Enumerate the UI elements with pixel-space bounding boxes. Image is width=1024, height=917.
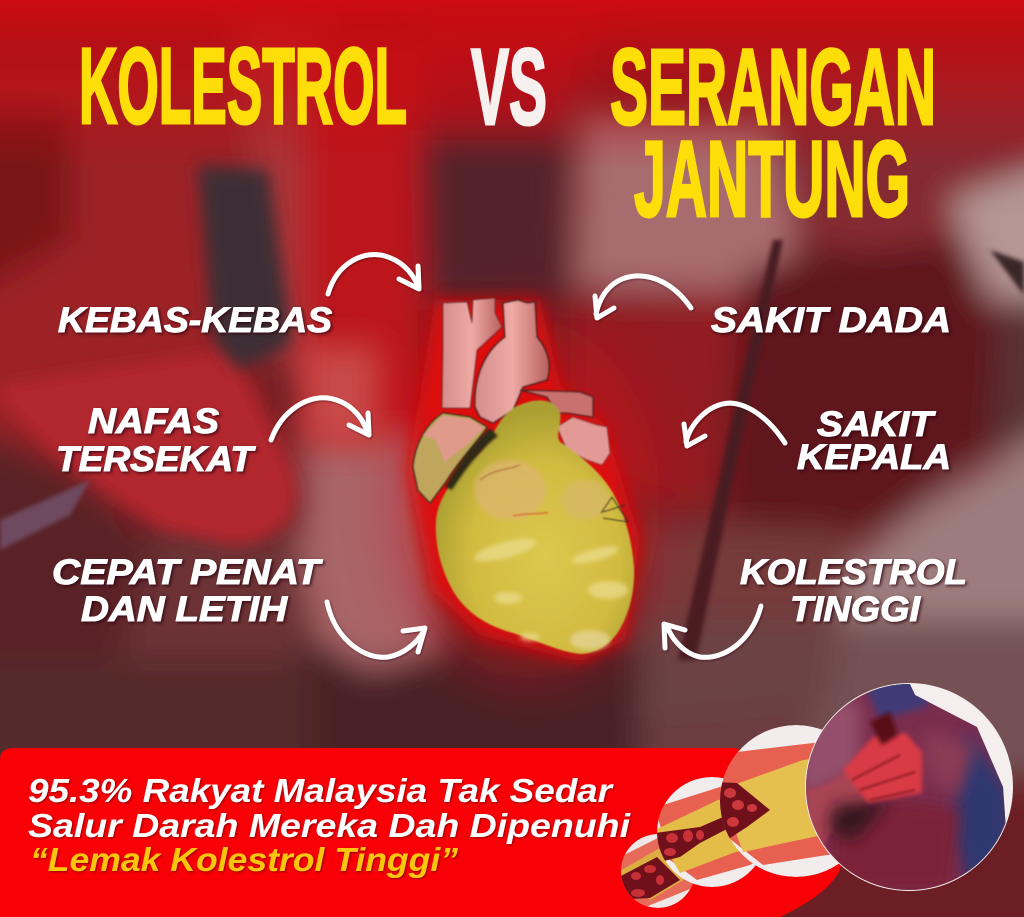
label: CEPAT PENAT DAN LETIH: DAN LETIH — [81, 590, 288, 629]
right atrium — [413, 413, 487, 503]
title: VS: VS — [471, 26, 547, 147]
label: KEBAS-KEBAS: KEBAS-KEBAS — [58, 301, 332, 340]
banner text — [28, 772, 631, 878]
vena cava vessel — [442, 298, 502, 408]
icon: man clutching chest circle — [805, 683, 1013, 891]
label: NAFAS TERSEKAT: NAFAS — [88, 402, 219, 441]
bottom red banner — [0, 748, 841, 917]
label: SAKIT DADA: SAKIT DADA — [711, 301, 951, 340]
label: NAFAS TERSEKAT — [56, 402, 256, 479]
arrow: sakit kepala to heart — [684, 403, 785, 446]
label: KOLESTROL TINGGI — [740, 553, 967, 629]
arrow: kolestrol tinggi to heart — [664, 606, 761, 657]
label: SAKIT KEPALA: KEPALA — [797, 438, 951, 477]
label: NAFAS TERSEKAT: TERSEKAT — [56, 440, 256, 479]
dark groove — [445, 428, 498, 490]
infographic canvas: KOLESTROL — [79, 25, 407, 146]
aorta vessel — [475, 300, 549, 423]
veins — [480, 465, 628, 522]
red glow behind heart — [408, 300, 640, 662]
label: SAKIT KEPALA — [797, 405, 951, 477]
label: KOLESTROL TINGGI: TINGGI — [790, 590, 921, 629]
label: CEPAT PENAT DAN LETIH — [52, 553, 323, 629]
arrow: sakit dada to heart — [595, 276, 691, 318]
fatty ventricles — [436, 400, 634, 654]
sharper photo forms — [300, 345, 380, 445]
banner text: “Lemak Kolestrol Tinggi” — [30, 841, 459, 878]
icon: artery small circle — [621, 834, 693, 908]
icon: fatty heart — [413, 298, 634, 654]
label: KOLESTROL TINGGI: KOLESTROL — [740, 553, 967, 592]
banner text: Salur Darah Mereka Dah Dipenuhi — [28, 807, 631, 844]
pulmonary vessel — [520, 390, 593, 417]
arrow: kebas to heart — [328, 255, 419, 294]
arrow: cepat penat to heart — [327, 602, 425, 657]
icon: artery medium circle — [657, 777, 756, 887]
arrow: nafas to heart — [271, 398, 369, 440]
title: SERANGAN JANTUNG — [610, 26, 936, 239]
icon: artery large circle — [720, 725, 839, 877]
highlights of fat — [472, 460, 628, 650]
label: CEPAT PENAT DAN LETIH: CEPAT PENAT — [52, 553, 323, 592]
banner text: 95.3% Rakyat Malaysia Tak Sedar — [28, 772, 614, 809]
left atrium — [557, 417, 610, 465]
label: SAKIT KEPALA: SAKIT — [817, 405, 936, 444]
